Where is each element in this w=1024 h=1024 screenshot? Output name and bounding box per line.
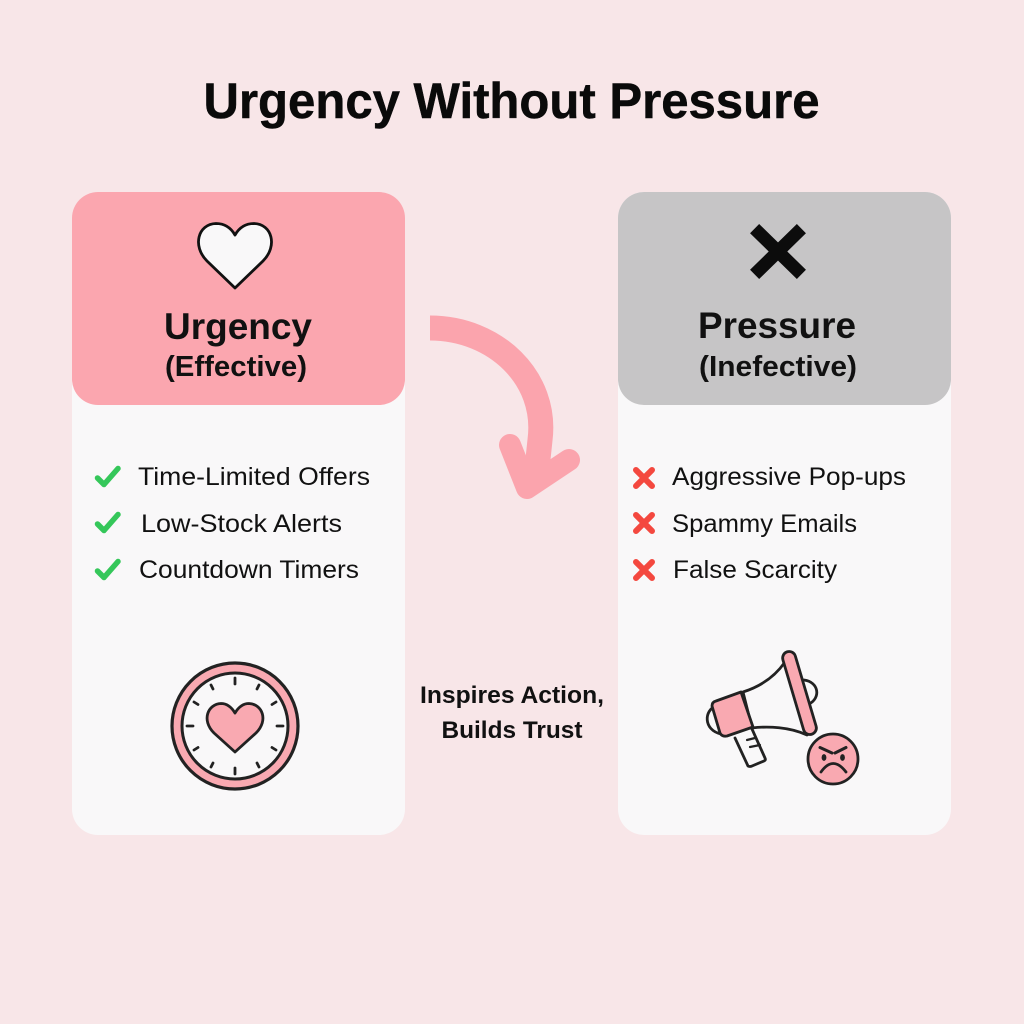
card body: pressure — [618, 192, 951, 835]
header: pressure — [618, 192, 951, 405]
list: ineffective tactics — [636, 463, 906, 584]
item: countdown timers: Countdown Timers — [139, 556, 359, 584]
header: urgency — [72, 192, 405, 405]
item: low-stock alerts: Low-Stock Alerts — [141, 510, 342, 538]
caption: inspires action, builds trust: Builds Trust — [442, 717, 582, 744]
icon: heart — [198, 224, 272, 288]
item: aggressive pop-ups: Aggressive Pop-ups — [672, 463, 906, 491]
arrow: urgency to pressure — [430, 328, 569, 488]
caption: inspires action, builds trust: Inspires Action, — [420, 682, 604, 709]
item: false scarcity: False Scarcity — [673, 556, 838, 584]
panel: urgency — [72, 192, 405, 835]
card body: urgency — [72, 192, 405, 835]
subheading: ineffective: (Inefective) — [699, 351, 857, 383]
panel: pressure — [618, 192, 951, 835]
title: Urgency Without Pressure — [204, 73, 820, 129]
caption: inspires action, builds trust — [420, 682, 604, 744]
list: effective tactics — [98, 463, 370, 584]
icon: megaphone with angry face — [707, 650, 858, 784]
heading: pressure: Pressure — [698, 305, 856, 346]
item: time-limited offers: Time-Limited Offers — [138, 463, 370, 491]
icon: clock with heart — [172, 663, 298, 789]
heading: urgency: Urgency — [164, 306, 312, 347]
subheading: effective: (Effective) — [165, 351, 307, 383]
icon: cross — [755, 229, 801, 274]
item: spammy emails: Spammy Emails — [672, 510, 857, 538]
